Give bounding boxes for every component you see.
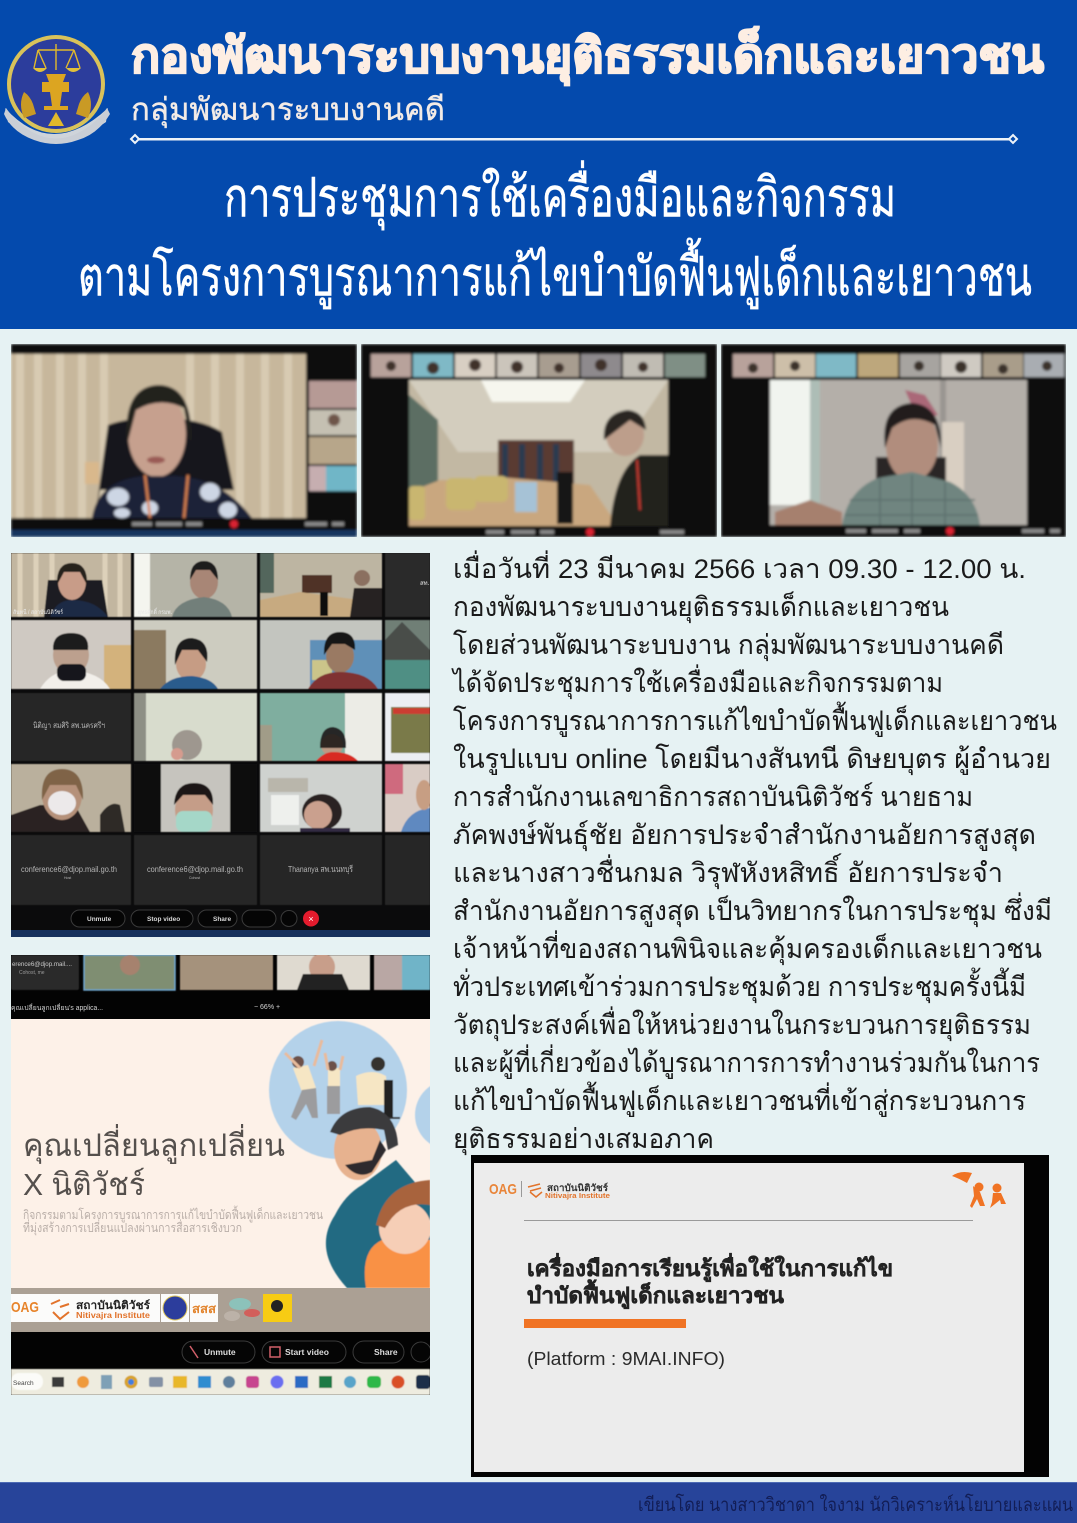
meeting control bar: Unmute — [204, 1347, 236, 1357]
photo: shared slide screenshot: Search — [13, 1380, 34, 1387]
body paragraph: ทั่วประเทศเข้าร่วมการประชุมด้วย การประชุมครั้งนี้มี — [453, 967, 1026, 1004]
panel: learning tool slide — [471, 1155, 1049, 1477]
name tags on tiles — [13, 580, 430, 616]
body paragraph: ภัคพงษ์พันธุ์ชัย อัยการประจำสำนักงานอัยการสูงสุด — [453, 819, 1036, 852]
photo: shared slide screenshot — [11, 955, 430, 1395]
participant labels: Cohost — [189, 876, 200, 880]
body paragraph: ในรูปแบบ online โดยมีนางสันทนี ดิษยบุตร ผู้อำนวย — [453, 743, 1051, 776]
photo: shared slide screenshot: Cohost, me — [19, 970, 45, 976]
body paragraph: กองพัฒนาระบบงานยุติธรรมเด็กและเยาวชน — [453, 589, 949, 624]
slide logos: Nitivajra Institute — [545, 1193, 610, 1200]
photo: shared slide screenshot: − 66% + — [254, 1004, 280, 1011]
slide logos: OAG — [489, 1181, 517, 1198]
slide logos: สถาบันนิติวัชร์ — [547, 1182, 609, 1194]
body paragraph: โดยส่วนพัฒนาระบบงาน กลุ่มพัฒนาระบบงานคดี — [453, 630, 1004, 662]
meeting control bar — [182, 1341, 431, 1363]
slide background — [11, 1019, 430, 1288]
participant labels: นิติญา สมศิริ สพ.นครศรีฯ — [33, 721, 105, 730]
photo: zoom screenshot with man in plaid shirt — [721, 344, 1066, 537]
subtitle: work group: กลุ่มพัฒนาระบบงานคดี — [131, 92, 445, 129]
meeting control bar: Unmute — [87, 916, 112, 923]
participant labels: Thananya สพ.นนทบุรี — [288, 864, 353, 875]
logo strip: OAG — [11, 1299, 39, 1316]
body paragraph: โครงการบูรณาการการแก้ไขบำบัดฟื้นฟูเด็กและเยาวชน — [453, 701, 1057, 737]
icon: orange children running — [952, 1172, 1006, 1208]
logo strip: สถาบันนิติวัชร์ — [76, 1299, 150, 1312]
body paragraph: และนางสาวชื่นกมล วิรุฬหังหสิทธิ์ อัยการประจำ — [453, 853, 1003, 890]
name tags on tiles: สันทนี / สถาบันนิติวัชร์ — [13, 608, 64, 616]
participant labels — [21, 721, 353, 880]
body paragraph: แก้ไขบำบัดฟื้นฟูเด็กและเยาวชนที่เข้าสู่กระบวนการ — [453, 1081, 1026, 1117]
body paragraph: เมื่อวันที่ 23 มีนาคม 2566 เวลา 09.30 - 12.00 น. — [453, 550, 1026, 584]
slide platform text: (Platform : 9MAI.INFO) — [527, 1348, 725, 1369]
body paragraph: ยุติธรรมอย่างเสมอภาค — [453, 1124, 714, 1156]
photo: zoom screenshot with presenter woman — [11, 344, 357, 537]
photo: shared slide screenshot: erence6@djop.mail.... — [12, 961, 72, 968]
participant labels: Host — [64, 876, 71, 880]
body paragraph: และผู้ที่เกี่ยวข้องได้บูรณาการการทำงานร่วมกันในการ — [453, 1044, 1040, 1079]
footer bar — [0, 1482, 1077, 1523]
body paragraph — [451, 550, 1057, 1156]
divider line with diamond ends — [131, 135, 1017, 143]
slide subtitle — [23, 1205, 323, 1236]
logo strip: สสส — [192, 1302, 217, 1316]
windows taskbar — [11, 1369, 430, 1395]
photo: shared slide screenshot: คุณเปลี่ยนลูกเปลี่ยน's applica... — [11, 1003, 103, 1012]
name tags on tiles: สท. — [420, 580, 430, 587]
meeting control bar: × — [308, 914, 314, 924]
logo strip — [11, 1288, 430, 1332]
slide logos — [489, 1181, 610, 1200]
name tags on tiles: ยุทธศักดิ์ กรมพ. — [138, 607, 172, 616]
logo strip: Nitivajra Institute — [76, 1311, 151, 1320]
row 1 — [11, 553, 131, 617]
title: organisation name: กองพัฒนาระบบงานยุติธรรมเด็กและเยาวชน — [131, 26, 1044, 86]
participant labels: conference6@djop.mail.go.th — [21, 864, 117, 874]
header banner — [0, 0, 1077, 329]
row 3 — [11, 693, 131, 761]
body paragraph: ได้จัดประชุมการใช้เครื่องมือและกิจกรรมตาม — [451, 664, 943, 700]
meeting control bar: Stop video — [147, 916, 180, 923]
row 2 — [11, 620, 131, 689]
participant labels: conference6@djop.mail.go.th — [147, 864, 243, 874]
meeting control bar — [11, 910, 430, 937]
body paragraph: เจ้าหน้าที่ของสถานพินิจและคุ้มครองเด็กและเยาวชน — [453, 930, 1042, 966]
illustration: family figures — [268, 1020, 430, 1288]
slide heading — [527, 1252, 893, 1310]
meeting control bar: Share — [213, 916, 231, 923]
meeting control bar: Start video — [285, 1347, 329, 1357]
icon: department emblem — [4, 35, 110, 144]
body paragraph: วัตถุประสงค์เพื่อให้หน่วยงานในกระบวนการยุติธรรม — [453, 1006, 1031, 1042]
slide subtitle: กิจกรรมตามโครงการบูรณาการการแก้ไขบำบัดฟื้นฟูเด็กและเยาวชน — [23, 1205, 323, 1223]
photo: gallery view of meeting participants — [11, 553, 432, 937]
photo: shared slide screenshot: X นิติวัชร์ — [23, 1167, 145, 1202]
slide heading: เครื่องมือการเรียนรู้เพื่อใช้ในการแก้ไข — [527, 1252, 893, 1283]
row 4 — [11, 764, 131, 832]
slide subtitle: ที่มุ่งสร้างการเปลี่ยนแปลงผ่านการสื่อสารเชิงบวก — [23, 1219, 242, 1236]
slide title: คุณเปลี่ยนลูกเปลี่ยน — [23, 1124, 285, 1165]
slide heading: บำบัดฟื้นฟูเด็กและเยาวชน — [527, 1279, 784, 1310]
body paragraph: สำนักงานอัยการสูงสุด เป็นวิทยากรในการประชุม ซึ่งมี — [453, 892, 1052, 928]
photo: zoom screenshot with conference room — [361, 344, 717, 537]
body paragraph: การสำนักงานเลขาธิการสถาบันนิติวัชร์ นายธาม — [453, 781, 973, 812]
meeting control bar: Share — [374, 1347, 398, 1357]
row 5 — [11, 835, 131, 905]
